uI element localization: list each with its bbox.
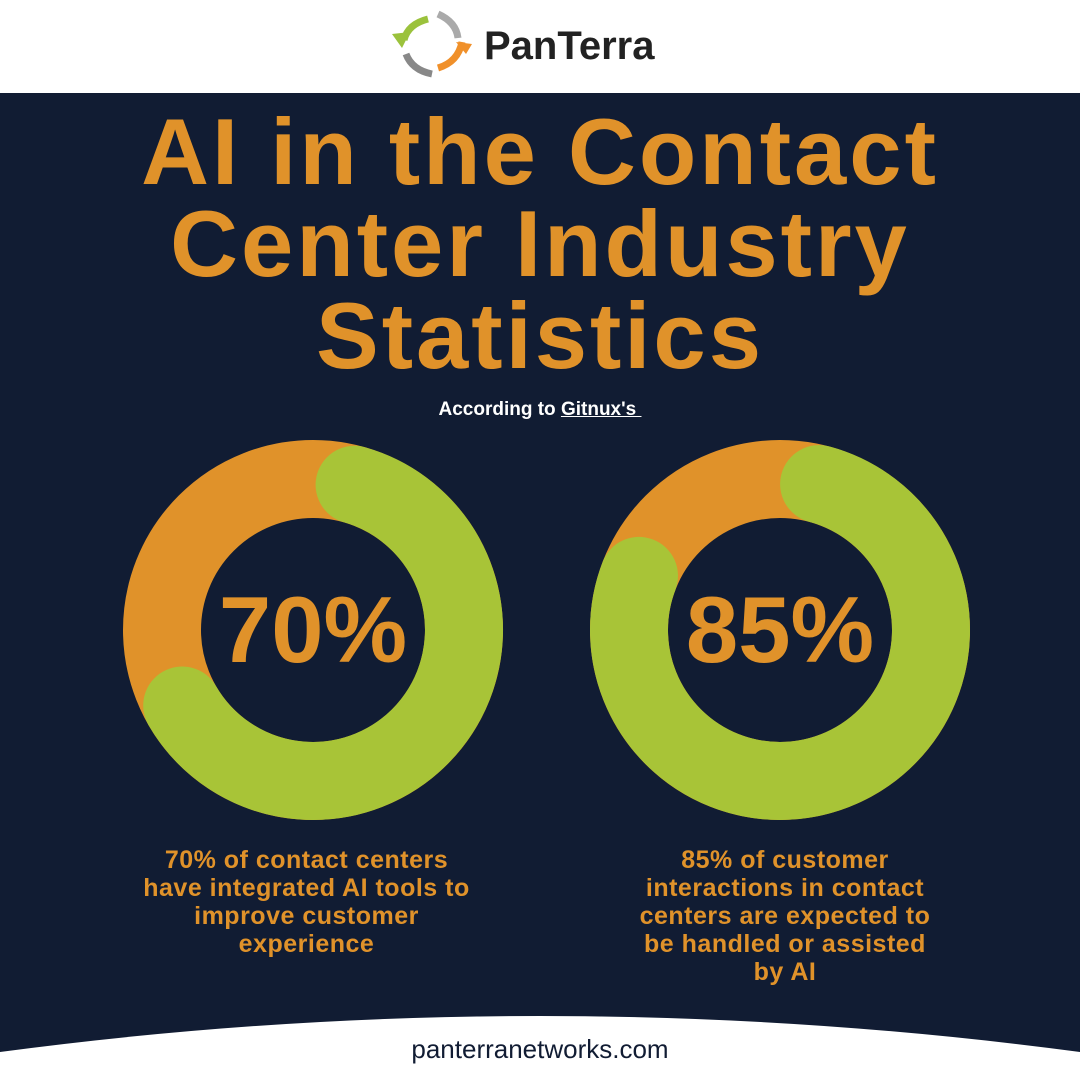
caption left: 70% of contact centers <box>165 846 448 874</box>
caption left: experience <box>239 930 374 958</box>
title: Center Industry <box>170 191 910 296</box>
subtitle: According to Gitnux's <box>438 399 636 420</box>
caption right: centers are expected to <box>640 902 930 930</box>
caption right: be handled or assisted <box>644 930 926 958</box>
title: Statistics <box>316 283 764 388</box>
caption right <box>640 846 930 986</box>
donut chart: 70% <box>123 440 504 820</box>
title: AI in the Contact <box>141 99 939 204</box>
footer url: panterranetworks.com <box>411 1034 669 1064</box>
donut chart: 85%: 85% <box>686 577 874 682</box>
logo: PanTerra <box>484 24 654 68</box>
title <box>141 99 939 388</box>
caption right: by AI <box>754 958 816 986</box>
caption right: 85% of customer <box>681 846 889 874</box>
logo <box>392 10 655 78</box>
caption left: have integrated AI tools to <box>143 874 470 902</box>
caption right: interactions in contact <box>646 874 924 902</box>
caption left: improve customer <box>194 902 419 930</box>
donut chart: 70%: 70% <box>219 577 407 682</box>
caption left <box>143 846 470 958</box>
donut chart: 85% <box>590 440 970 820</box>
